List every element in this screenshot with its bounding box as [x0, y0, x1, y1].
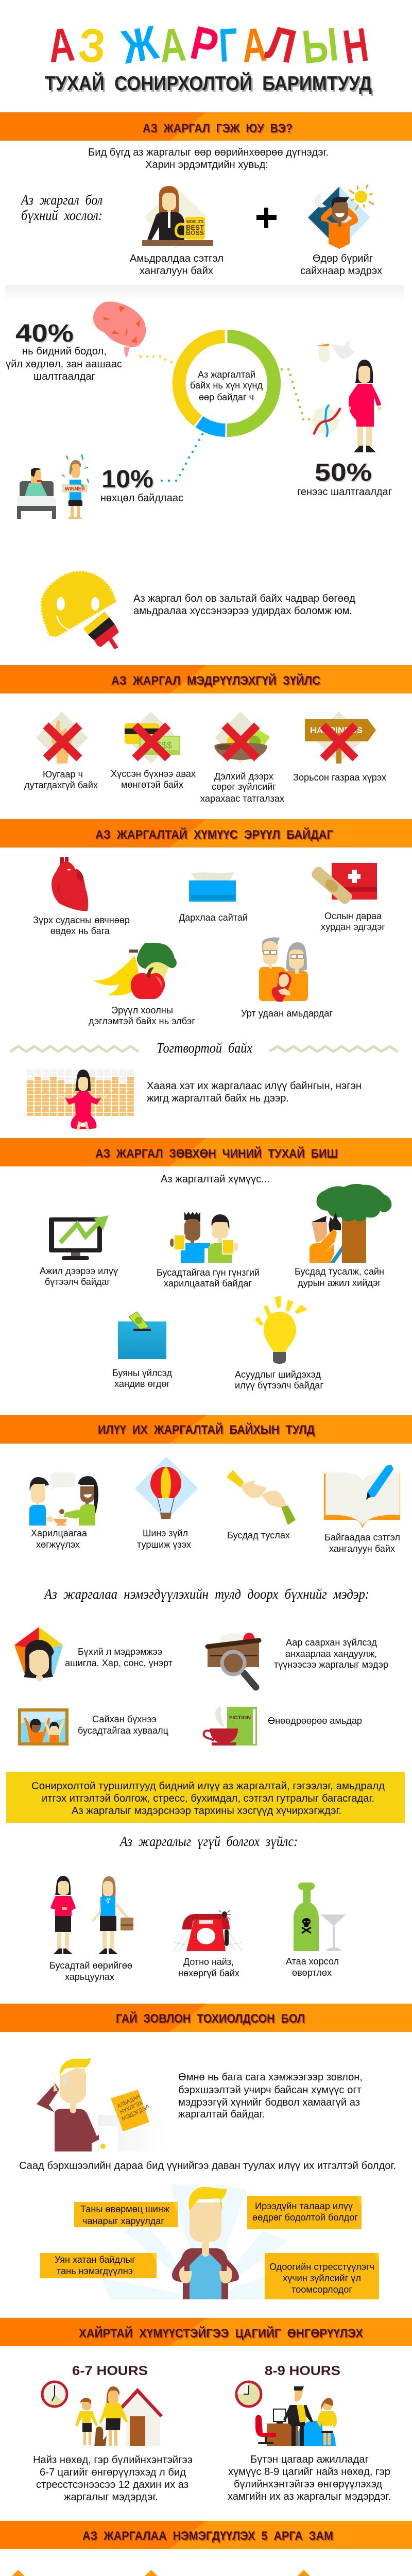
text: people with adversity are happier: бэрхшээлтэй учирч байсан хүмүүс огт — [178, 2084, 362, 2096]
caption: savor small things — [274, 1637, 388, 1670]
section banner: when misfortune happens — [0, 2004, 412, 2032]
donut: centre text: Аз жаргалтай — [198, 369, 255, 380]
title: colourful letters: Н — [340, 18, 371, 74]
caption: jealousy: Атаа хорсол — [286, 1956, 339, 1967]
icon: monitor with growth arrow — [49, 1215, 109, 1260]
text: people with adversity are happier: жаргалтай байдаг. — [178, 2109, 265, 2120]
icon: framed photo — [18, 1708, 68, 1745]
stat: 50 percent — [297, 459, 392, 498]
title: colourful letters: Р — [186, 15, 223, 73]
icon: heart — [52, 857, 88, 911]
icon: lottery winner woman: WINNER — [65, 486, 85, 492]
caption: develop relationships — [31, 1528, 88, 1550]
text: steady happiness is better — [147, 1080, 362, 1104]
text: people with adversity are happier: мэдрээгүй хүнийг бодвол хамаагүй аз — [178, 2097, 360, 2108]
crossed item: reaching destination: HAPPINESS — [310, 725, 363, 735]
icon: donation box — [118, 1312, 166, 1359]
stat: 50 percent: 50% — [315, 459, 372, 486]
caption: wanting for nothing: Юугаар ч — [43, 769, 83, 779]
icon: family with house and dog — [75, 2386, 163, 2446]
icon: confident man with rays — [100, 2184, 288, 2299]
icon: office scene — [255, 2386, 337, 2446]
title: colourful letters: З — [76, 18, 108, 73]
text: 8-9 hours explanation: хүмүүс 8-9 цагийг найз нөхөд, гэр — [228, 2466, 390, 2478]
caption: no close friends — [178, 1957, 239, 1978]
caption: more productive at work: бүтээлч байдаг — [45, 1277, 110, 1287]
stat: 10 percent: 10% — [101, 466, 153, 493]
icon: man under sun and moon — [308, 184, 374, 249]
icon: first aid kit and bandage — [310, 863, 377, 906]
script heading: happiness is a combination — [20, 192, 102, 223]
icon: coffee and fiction book — [204, 1706, 257, 1745]
section banner: happy people are healthy: АЗ ЖАРГАЛТАЙ ХҮМҮҮС ЭРҮҮЛ БАЙДАГ — [95, 827, 333, 842]
title: colourful letters: А — [46, 18, 77, 73]
heading: 8-9 hours: 8-9 HOURS — [265, 2364, 340, 2378]
title — [45, 15, 372, 95]
caption: healthy diet — [89, 1005, 195, 1026]
stat: 40 percent — [6, 320, 122, 382]
caption: satisfied with life: Амьдралдаа сэтгэл — [130, 253, 224, 264]
caption: satisfied with life — [130, 253, 224, 277]
stat: 10 percent — [100, 466, 183, 504]
caption: develop relationships: хөгжүүлэх — [36, 1539, 80, 1550]
text: 8-9 hours explanation: бүлийнхэнтэйгээ өнгөрүүлэхэд — [234, 2479, 382, 2490]
script heading: happiness is a combination: Аз жаргал бол — [20, 192, 102, 208]
icon: smiley painted by brush — [42, 571, 119, 649]
panel: 6-7 hours — [33, 2364, 193, 2503]
caption: try new things: туршиж үзэх — [137, 1539, 191, 1550]
caption: deep relationships: Бусадтайгаа гүн гүнзгий — [157, 1267, 260, 1278]
caption: volunteering: дурын ажил хийдэг — [298, 1278, 381, 1288]
caption: use all senses: Бүхий л мэдрэмжээ — [78, 1647, 162, 1657]
title: colourful letters — [46, 15, 371, 74]
text: happiness as ability: Аз жаргал бол ов зальтай байх чадвар бөгөөд — [133, 593, 355, 604]
caption: good immunity: Дархлаа сайтай — [179, 912, 248, 923]
caption: try new things — [137, 1528, 191, 1550]
caption: heals faster: хурдан эдгэдэг — [321, 922, 385, 932]
callout: ignores stressors: тоомсорлодог — [291, 2284, 352, 2295]
caption: use all senses: ашигла. Хар, сонс, үнэрт — [65, 1658, 173, 1668]
title: colourful letters: А — [158, 18, 188, 73]
caption: jealousy: өвөртлөх — [292, 1968, 332, 1978]
donut: 40 percent thoughts — [179, 336, 225, 421]
icon: woman in colourful kite — [14, 1627, 63, 1681]
icon: light bulb — [255, 1296, 307, 1364]
crossed item: reaching destination — [305, 711, 376, 764]
caption: share good things — [78, 1714, 168, 1736]
caption: be content: Байгаадаа сэтгэл — [324, 1532, 400, 1543]
icon: stork with bundle — [316, 338, 355, 362]
caption: comparing yourself — [49, 1960, 132, 1982]
icon: cake under magnifying glass — [208, 1633, 259, 1687]
icon: worried man with notice: МЭДЭГДЭЛ — [121, 2104, 150, 2122]
icon: pregnant woman — [348, 360, 382, 452]
callout: ignores stressors: хүчин зүйлсийг үл — [283, 2273, 361, 2283]
icon: worried man with notice — [37, 2058, 165, 2151]
icon: coffee and fiction book: FICTION — [229, 1715, 251, 1720]
intro text: Харин эрдэмтдийн хувьд: — [145, 159, 268, 171]
heading: 6-7 hours: 6-7 HOURS — [72, 2364, 148, 2378]
caption: live longer: Урт удаан амьдардаг — [241, 1008, 333, 1019]
caption: more productive at work: Ажил дээрээ илүү — [40, 1266, 118, 1276]
icon: woman with best boss mug: WORLD'S — [186, 219, 204, 224]
section banner: to be happier: ИЛҮҮ ИХ ЖАРГАЛТАЙ БАЙХЫН ТУЛД — [98, 1422, 315, 1437]
text: happiness as ability — [133, 593, 355, 617]
stat: 50 percent: генээс шалтгаалдаг — [297, 486, 392, 498]
icon: worried man with notice: НҮҮЛГЭХ — [119, 2099, 144, 2115]
caption: creative in solving problems — [235, 1369, 323, 1391]
icon: hot air balloon — [135, 1456, 198, 1520]
stat: 40 percent: үйл хөдлөл, зан аашаас — [6, 359, 122, 370]
caption: wanting for nothing — [24, 769, 98, 790]
intro: happy people: Аз жаргалтай хүмүүс... — [161, 1174, 270, 1185]
step 1 — [6, 2570, 135, 2576]
caption: feel good every day: Өдөр бүрийг — [313, 253, 373, 264]
text: steady happiness is better: Хааяа хэт их жаргалаас илүү байнгын, нэгэн — [147, 1080, 362, 1092]
section banner: to be happier — [0, 1415, 412, 1444]
icon: clock at nine — [236, 2382, 261, 2406]
caption: less heart disease: Зүрх судасны өвчнөөр — [33, 915, 130, 925]
icon: worried man with notice: АЛБАДАН — [116, 2093, 141, 2110]
icon: woman with best boss mug: BOSS — [186, 229, 204, 236]
callout: experiments yellow block — [6, 1772, 405, 1823]
donut chart — [179, 336, 274, 430]
icon: healthy food — [93, 943, 177, 999]
caption: savor small things: түүнээсээ жаргалыг мэдэр — [274, 1659, 388, 1670]
icon: dusty phone with spider — [173, 1910, 242, 1951]
section banner: what does not bring happiness: АЗ ЖАРГАЛ МЭДРҮҮЛЭХГҮЙ ЗҮЙЛС — [111, 673, 320, 688]
intro text: Бид бүгд аз жаргалыг өөр өөрийнхөөрөө дүгнэдэг. — [88, 147, 329, 158]
icon: sick man in bed — [17, 468, 56, 519]
script heading: be stable: Тогтвортой байх — [157, 1040, 252, 1056]
callout: ignores stressors — [265, 2253, 379, 2299]
title: colourful letters: Г — [217, 18, 239, 72]
stat: 40 percent: нь бидний бодол, — [22, 346, 107, 357]
text: happiness as ability: амьдралаа хүссэнээрээ удирдах боломж юм. — [133, 605, 352, 617]
text: steady happiness is better: жигд жаргалтай байх нь дээр. — [147, 1093, 289, 1104]
caption: healthy diet: дэглэмтэй байх нь элбэг — [89, 1016, 195, 1026]
title: colourful letters: А — [240, 18, 268, 72]
caption: money for everything: Хүссэн бүхнээ авах — [111, 769, 196, 779]
icon: two people talking over tea — [29, 1472, 98, 1526]
callout: shows your strengths: Таны өвөрмөц шинж — [80, 2204, 169, 2214]
section banner: what is happiness: АЗ ЖАРГАЛ ГЭЖ ЮУ ВЭ? — [143, 122, 293, 135]
icon: brain — [93, 301, 146, 357]
caption: ignoring bad things: Дэлхий дээрх — [214, 771, 273, 782]
text: 6-7 hours explanation: Найз нөхөд, гэр бүлийнхэнтэйгээ — [33, 2454, 193, 2466]
stat: 40 percent: шалтгаалдаг — [33, 371, 95, 382]
callout: more optimistic — [247, 2196, 362, 2229]
crossed item: wanting for nothing — [36, 711, 88, 764]
section banner: what does not bring happiness — [0, 665, 412, 693]
caption: deep relationships — [157, 1267, 260, 1289]
caption: donates to charity: Буяны үйлсэд — [112, 1368, 172, 1378]
caption: savor small things: Аар саархан зүйлсэд — [286, 1637, 377, 1648]
caption: comparing yourself: Бусадтай өөрийгөө — [49, 1960, 132, 1971]
section banner: five ways: АЗ ЖАРГАЛАА НЭМЭГДҮҮЛЭХ 5 АРГА ЗАМ — [82, 2529, 333, 2543]
section banner: when misfortune happens: ГАЙ ЗОВЛОН ТОХИОЛДСОН БОЛ — [116, 2011, 305, 2026]
caption: be content: хангалуун байх — [329, 1544, 395, 1554]
caption: share good things: Сайхан бүхнээ — [92, 1714, 157, 1724]
title: colourful letters: Ж — [117, 15, 162, 74]
section banner: happy people are healthy — [0, 819, 412, 848]
donut: centre text: байх нь хүн хүнд — [190, 380, 263, 391]
section banner: time with loved ones — [0, 2318, 412, 2346]
callout: shows your strengths: чанарыг харуулдаг — [82, 2216, 164, 2226]
caption: volunteering — [295, 1266, 384, 1288]
caption: reaching destination: Зорьсон газраа хүрэх — [293, 772, 386, 783]
caption: comparing yourself: харьцуулах — [65, 1972, 114, 1982]
caption: feel good every day: сайхнаар мэдрэх — [300, 265, 382, 277]
plus sign — [256, 208, 277, 228]
caption: use all senses — [65, 1647, 173, 1668]
panel: 8-9 hours — [228, 2364, 391, 2502]
caption: try new things: Шинэ зүйл — [143, 1528, 188, 1538]
callout: experiments yellow block: Сонирхолтой туршилтууд бидний илүү аз жаргалтай, гэгээлэг, амьдралд — [31, 1781, 385, 1792]
caption: help others: Бусдад туслах — [227, 1530, 290, 1540]
text: 8-9 hours explanation — [228, 2454, 391, 2502]
icon: DNA helix — [312, 405, 340, 437]
caption: jealousy — [286, 1956, 339, 1978]
crossed item: ignoring bad things — [214, 711, 270, 764]
icon: clock at seven — [42, 2382, 67, 2406]
caption: more productive at work — [40, 1266, 118, 1287]
caption: develop relationships: Харилцаагаа — [31, 1528, 88, 1538]
callout: ignores stressors: Одоогийн стресстүүлэгч — [269, 2262, 374, 2272]
callout: more resilient: тань нэмэгдүүлнэ — [57, 2266, 133, 2276]
text: 6-7 hours explanation: жаргалыг мэдэрдэг. — [64, 2492, 158, 2503]
text: 8-9 hours explanation: Бүтэн цагаар ажилладаг — [250, 2454, 369, 2465]
callout: experiments yellow block: Аз жаргалыг мэдэрснээр тархины хэсгүүд хүчирхэгждэг. — [72, 1805, 341, 1817]
text: 6-7 hours explanation — [33, 2454, 193, 2503]
caption: deep relationships: харилцаатай байдаг — [164, 1278, 252, 1289]
stat: 40 percent: 40% — [15, 320, 74, 347]
title: subtitle: ТУХАЙ СОНИРХОЛТОЙ БАРИМТУУД — [45, 72, 372, 95]
caption: satisfied with life: хангалуун байх — [140, 265, 213, 277]
caption: donates to charity — [112, 1368, 172, 1389]
intro text — [88, 147, 329, 171]
caption: ignoring bad things: харахаас татгалзах — [200, 793, 284, 804]
icon: man rescuing cat from tree — [310, 1184, 391, 1263]
caption: ignoring bad things — [200, 771, 284, 804]
callout: more resilient: Уян хатан байдлыг — [55, 2255, 135, 2265]
section banner: not only about you: АЗ ЖАРГАЛ ЗӨВХӨН ЧИНИЙ ТУХАЙ БИШ — [95, 1146, 338, 1161]
donut: 50 percent genes — [227, 336, 274, 430]
caption: wanting for nothing: дутагдахгүй байх — [24, 780, 98, 790]
icon: two friends with beer — [170, 1212, 238, 1263]
caption: creative in solving problems: Асуудлыг шийдэхэд — [235, 1369, 321, 1380]
caption: heals faster: Ослын дараа — [324, 911, 382, 921]
callout: more resilient — [40, 2253, 157, 2278]
caption: no close friends: нөхөргүй байх — [178, 1968, 239, 1978]
icon: lottery winner woman — [61, 454, 89, 519]
caption: creative in solving problems: илүү бүтээлч байдаг — [235, 1380, 323, 1391]
icon: meditating woman — [58, 1070, 108, 1131]
caption: feel good every day — [300, 253, 382, 277]
text: people with adversity are happier: Өмнө нь бага сага хэмжээгээр зовлон, — [178, 2072, 363, 2083]
icon: poison bottle and glass — [294, 1883, 346, 1951]
step 2 — [139, 2570, 268, 2576]
crossed item: money for everything — [125, 711, 180, 764]
caption: no close friends: Дотно найз, — [183, 1957, 234, 1967]
dotted connector: thoughts — [139, 355, 173, 363]
dotted connector: circumstances — [161, 433, 203, 482]
icon: elderly couple with baby — [259, 937, 308, 1002]
caption: ignoring bad things: сөрөг зүйлсийг — [212, 782, 276, 792]
title: colourful letters: Ы — [300, 18, 341, 74]
crossed item: money for everything: $$$ — [157, 740, 172, 751]
icon: open book with pen — [324, 1465, 400, 1529]
caption: healthy diet: Эрүүл хоолны — [111, 1005, 173, 1015]
number badge 3 — [291, 2570, 316, 2576]
section banner: not only about you — [0, 1138, 412, 1166]
icon: helping hands — [227, 1470, 296, 1525]
callout: more optimistic: Ирээдүйн талаар илүү — [255, 2201, 353, 2211]
caption: donates to charity: хандив өгдөг — [114, 1379, 170, 1389]
icon: woman with best boss mug: BEST — [186, 224, 204, 231]
caption: money for everything — [111, 769, 196, 790]
icon: two women comparing — [50, 1876, 133, 1954]
donut: centre text: өөр байдаг ч — [199, 392, 254, 402]
caption: less heart disease — [33, 915, 130, 936]
caption: share good things: бусадтайгаа хуваалц — [78, 1725, 168, 1736]
caption: heals faster — [321, 911, 385, 932]
caption: live in the present: Өнөөдрөөрөө амьдар — [268, 1716, 362, 1726]
stat: 10 percent: нөхцөл байдлаас — [100, 493, 183, 504]
chart: equalizer bars behind meditating woman — [27, 1070, 134, 1131]
number badge 1 — [6, 2570, 30, 2576]
text: more confident after adversity: Саад бэрхшээлийн дараа бид үүнийгээ даван туулах илүү их итгэлтэй болдог. — [19, 2160, 396, 2172]
text: 6-7 hours explanation: 6-7 цагийг өнгөрүүлэхэд л бид — [40, 2467, 186, 2478]
title: colourful letters: Л — [262, 16, 301, 74]
icon: tissue box — [189, 872, 236, 902]
section banner: five ways — [0, 2521, 412, 2549]
number badge 2 — [139, 2570, 163, 2576]
text: 6-7 hours explanation: стресстсэнээсээ 12 дахин их аз — [36, 2479, 188, 2490]
section banner: what is happiness — [0, 112, 412, 141]
donut: centre text — [190, 369, 263, 402]
step 3 — [291, 2570, 398, 2576]
section banner: time with loved ones: ХАЙРТАЙ ХҮМҮҮСТЭЙГЭЭ ЦАГИЙГ ӨНГӨРҮҮЛЭХ — [79, 2326, 363, 2341]
text: 8-9 hours explanation: хамгийн их аз жаргалыг мэдэрдэг. — [228, 2491, 391, 2502]
caption: volunteering: Бусдад тусалж, сайн — [295, 1266, 384, 1277]
caption: savor small things: анхаарлаа хандуулж, — [285, 1649, 377, 1659]
icon: woman with best boss mug — [142, 186, 213, 249]
script heading: things that destroy happiness: Аз жаргалыг үгүй болгох зүйлс: — [119, 1834, 298, 1849]
caption: less heart disease: өвдөх нь бага — [50, 926, 110, 936]
dotted connector: genes — [281, 368, 315, 420]
text: people with adversity are happier — [178, 2072, 363, 2120]
callout: shows your strengths — [74, 2202, 178, 2227]
caption: be content — [324, 1532, 400, 1554]
callout: experiments yellow block: итгэх итгэлтэй болгож, стресс, бухимдал, сэтгэл гутралыг багасгадаг. — [42, 1793, 374, 1804]
decorative shaded band — [5, 285, 404, 300]
donut: 10 percent circumstances — [199, 421, 225, 430]
script heading: happiness is a combination: бүхний хослол: — [21, 208, 102, 223]
script heading: feel everything to be happier: Аз жаргалаа нэмэгдүүлэхийн тулд доорх бүхнийг мэдэр: — [43, 1586, 369, 1602]
callout: more optimistic: өөдрөг бодолтой болдог — [252, 2212, 358, 2223]
caption: money for everything: мөнгөтэй байх — [121, 779, 183, 790]
